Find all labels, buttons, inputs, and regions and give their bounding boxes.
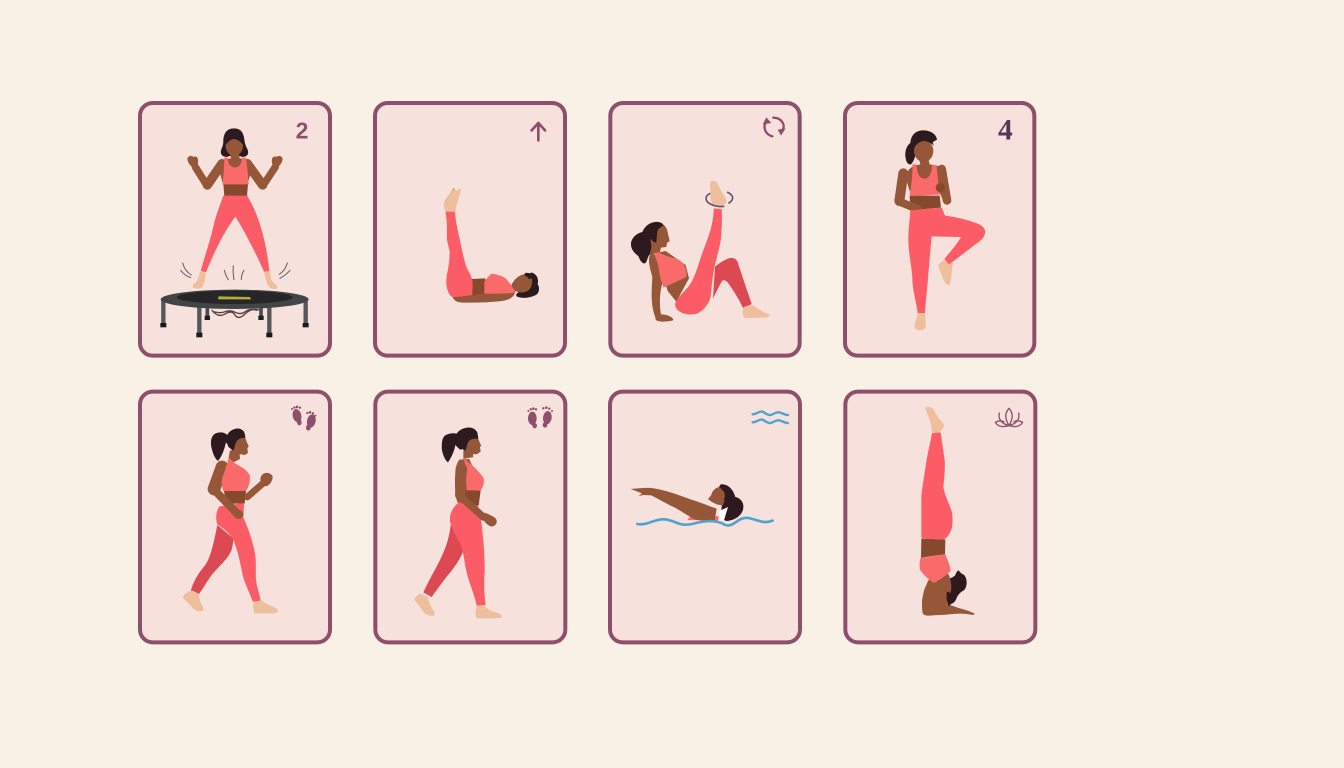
icon: lotus	[995, 408, 1023, 427]
icon: footprints	[527, 406, 553, 428]
panel: walking card	[375, 392, 565, 642]
panel: ankle circles card	[610, 103, 800, 356]
panel: trampoline jump card	[140, 103, 330, 356]
figure: woman jumping	[187, 128, 283, 289]
panel: swimming card	[610, 392, 800, 642]
icon: footprints	[291, 406, 317, 431]
ankle rotation arrows	[706, 192, 733, 207]
icon: water waves	[753, 411, 788, 423]
trampoline	[160, 290, 309, 337]
panel: leg raise card	[375, 103, 565, 356]
panel: power walk card	[140, 392, 330, 642]
figure: woman walking with arms bent	[183, 429, 278, 613]
figure: woman lying with legs up	[444, 188, 539, 303]
figure: woman seated with leg raised	[631, 181, 770, 322]
panel: headstand card	[845, 392, 1035, 642]
figure: woman standing on one leg	[899, 130, 985, 331]
figure: woman walking upright	[414, 427, 502, 618]
number badge: 4: 4	[998, 115, 1013, 147]
figure: woman in headstand	[920, 407, 975, 616]
motion lines	[181, 263, 290, 280]
icon: rotate arrows	[763, 117, 786, 136]
figure: woman swimming	[631, 484, 773, 525]
number badge: 2: 2	[296, 117, 308, 143]
icon: up arrow	[532, 123, 545, 140]
panel: knee raise card	[845, 103, 1034, 356]
